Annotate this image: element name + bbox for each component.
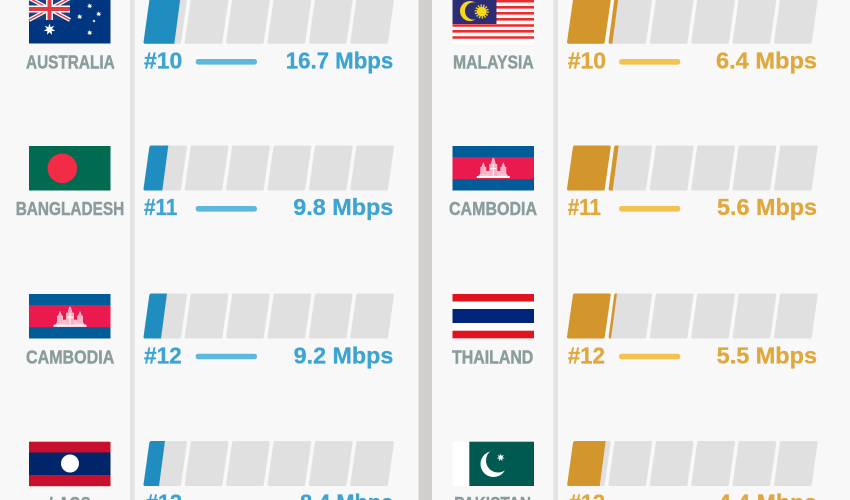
row: Laos, 8.4 Mbps	[29, 441, 393, 500]
speed bar	[567, 441, 816, 486]
rank: #11	[144, 194, 177, 220]
connector line	[196, 59, 257, 65]
country label: CAMBODIA	[26, 347, 114, 367]
rank: #12	[568, 342, 605, 368]
speed value: 9.2 Mbps	[294, 342, 393, 368]
icon: flag of Laos	[29, 442, 110, 486]
icon: flag of Bangladesh	[29, 146, 110, 190]
speed bar	[568, 294, 816, 338]
country label: MALAYSIA	[453, 52, 534, 72]
speed bar	[144, 441, 392, 486]
connector line	[619, 354, 680, 359]
icon: flag of Malaysia	[452, 0, 534, 44]
connector line	[619, 59, 680, 65]
row: Pakistan, 4.4 Mbps	[453, 441, 817, 500]
speed bar	[144, 294, 392, 338]
speed bar	[144, 146, 392, 190]
rank: #10	[144, 47, 182, 73]
country label: BANGLADESH	[16, 199, 124, 219]
icon: flag of Thailand	[452, 294, 534, 338]
speed value: 16.7 Mbps	[286, 47, 393, 73]
speed bar	[568, 146, 816, 190]
country label: CAMBODIA	[449, 199, 537, 219]
row: Thailand, 5.5 Mbps	[452, 294, 817, 368]
row: Malaysia, 6.4 Mbps	[452, 0, 817, 73]
rank: #11	[568, 194, 601, 220]
country label: THAILAND	[452, 347, 533, 367]
rank: #10	[568, 47, 606, 73]
row: Cambodia, 5.6 Mbps	[449, 146, 817, 220]
speed bar	[568, 0, 816, 44]
rank: #12	[144, 342, 182, 368]
country label: AUSTRALIA	[26, 52, 115, 72]
connector line	[196, 206, 257, 212]
speed value: 5.5 Mbps	[717, 342, 817, 368]
speed value: 5.6 Mbps	[717, 194, 817, 220]
connector line	[619, 206, 680, 212]
row: Bangladesh, 9.8 Mbps	[16, 146, 393, 220]
speed bar	[144, 0, 392, 44]
icon: flag of Pakistan	[453, 442, 534, 486]
row: Cambodia, 9.2 Mbps	[26, 294, 393, 368]
speed value: 6.4 Mbps	[716, 47, 817, 73]
icon: flag of Cambodia	[29, 294, 110, 338]
icon: flag of Australia	[29, 0, 110, 44]
icon: flag of Cambodia	[452, 146, 534, 190]
connector line	[196, 354, 257, 359]
speed value: 9.8 Mbps	[293, 194, 393, 220]
row: Australia, 16.7 Mbps	[26, 0, 393, 73]
